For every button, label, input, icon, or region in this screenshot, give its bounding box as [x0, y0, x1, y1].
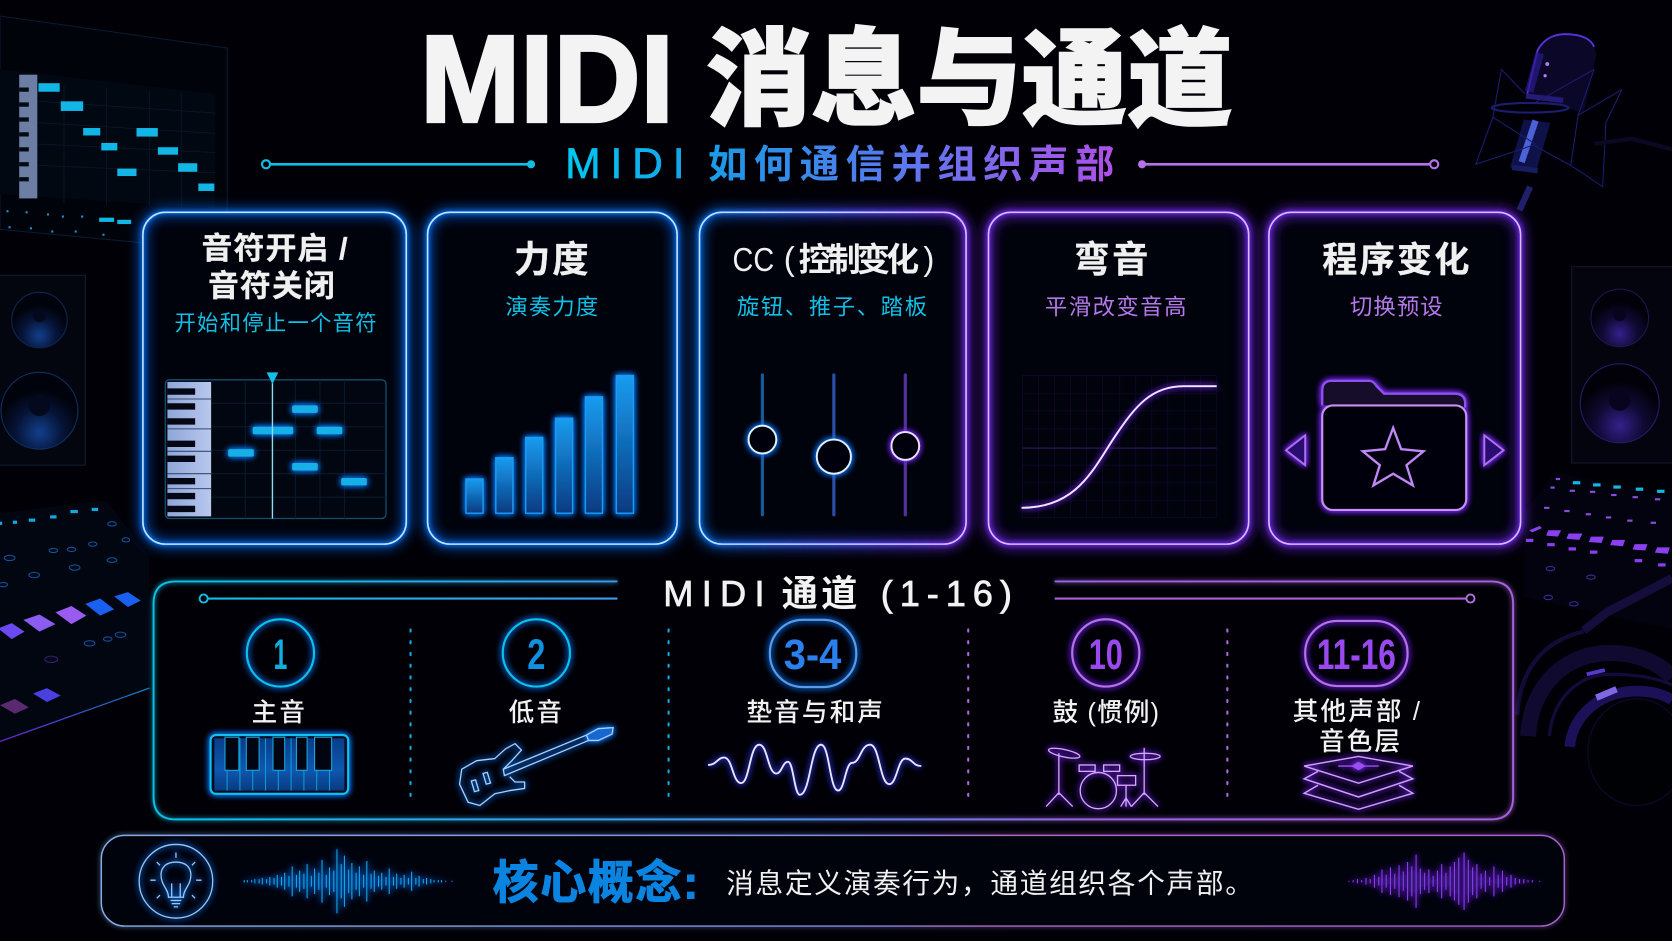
card frame: [700, 212, 966, 544]
card frame: [428, 212, 677, 544]
panel: pitch bend: [988, 212, 1249, 544]
label: 其他声部 /: [1293, 697, 1422, 726]
subtitle text: MIDI: [565, 140, 685, 188]
arrow right: [1484, 435, 1504, 465]
label: [1293, 697, 1422, 756]
heading: 力度: [514, 239, 591, 280]
badge 1: 1: [274, 631, 287, 679]
heading: 核心概念:: [493, 856, 698, 908]
badge 3-4: [770, 620, 856, 687]
card frame: [988, 212, 1249, 544]
panel: note on / off: [143, 212, 406, 544]
heading: 音符开启 /: [201, 231, 349, 266]
heading: ): [923, 241, 934, 278]
label: 主音: [252, 698, 307, 727]
badge 11-16: [1305, 621, 1408, 686]
subheading: 开始和停止一个音符: [174, 312, 378, 336]
text: key message: 消息定义演奏行为，通道组织各个声部。: [726, 868, 1253, 899]
subtitle text: [565, 140, 1114, 188]
label: 垫音与和声: [746, 698, 885, 727]
background: microphone: [1476, 34, 1672, 210]
subheading: 演奏力度: [505, 295, 599, 320]
icon: layers: [1304, 756, 1413, 809]
subheading: 旋钮、推子、踏板: [737, 295, 929, 320]
card frame: [143, 212, 406, 544]
folder icon with star: [1322, 381, 1466, 510]
channel 10: drums: [1046, 619, 1160, 809]
subtitle line right: [1138, 160, 1438, 168]
heading: [663, 573, 1012, 614]
bend curve: [1022, 376, 1217, 517]
waveform left: [244, 849, 452, 913]
bar chart: [466, 376, 633, 513]
icon: drum kit: [1046, 746, 1160, 809]
heading: 通道: [782, 573, 857, 614]
heading: MIDI: [663, 573, 765, 614]
channel 2: bass: [460, 619, 613, 806]
label: 音色层: [1319, 727, 1402, 756]
background: right mixer: [1525, 472, 1672, 629]
icon: wave: [708, 745, 921, 795]
icon: bass guitar: [460, 728, 613, 806]
panel: CC control change: [700, 212, 966, 544]
subtitle text: 如何通信并组织声部: [708, 143, 1114, 187]
badge 11-16: 11-16: [1317, 631, 1396, 679]
heading: 程序变化: [1322, 241, 1472, 280]
badge 10: [1072, 619, 1139, 687]
badge 10: 10: [1089, 631, 1123, 679]
icon: keyboard: [211, 735, 348, 794]
channel 1: lead: [211, 619, 348, 794]
heading: 弯音: [1074, 239, 1151, 280]
panel: program change: [1269, 212, 1521, 544]
badge 3-4: 3-4: [784, 631, 842, 679]
title: [420, 0, 1233, 149]
icon: light bulb: [139, 844, 213, 918]
panel: velocity: [428, 212, 677, 544]
heading: (: [784, 241, 795, 278]
channel 3-4: pads and harmony: [708, 620, 921, 795]
heading: (1-16): [881, 573, 1012, 614]
arrow left: [1286, 435, 1305, 465]
heading: [201, 231, 349, 304]
card frame: [1269, 212, 1521, 544]
subheading: 平滑改变音高: [1045, 295, 1188, 320]
badge 2: [503, 619, 570, 687]
piano roll: [165, 372, 386, 519]
label: 鼓 (惯例): [1052, 698, 1159, 727]
background: right studio speaker: [1572, 267, 1672, 463]
background: left studio speaker: [0, 275, 85, 465]
waveform right: [1349, 852, 1540, 910]
background: headphones: [1517, 578, 1672, 806]
title: MIDI: [420, 11, 674, 149]
callout: core concept: [101, 835, 1564, 926]
subtitle line left: [262, 160, 535, 168]
subtitle: [262, 140, 1438, 188]
panel: MIDI channels: [154, 573, 1513, 819]
badge 1: [247, 619, 314, 687]
sliders: [749, 373, 919, 516]
subheading: 切换预设: [1350, 295, 1444, 320]
dividers: [411, 629, 1227, 796]
heading: 音符关闭: [208, 269, 336, 304]
callout frame: [101, 835, 1564, 926]
channel 11-16: other parts and layers: [1293, 621, 1422, 809]
background: left monitor with piano roll: [0, 16, 227, 251]
background: left mixer: [0, 500, 149, 741]
label: 低音: [509, 698, 564, 727]
heading: CC: [733, 242, 774, 279]
badge 2: 2: [527, 631, 545, 679]
heading: 控制变化: [799, 242, 919, 279]
panel frame: [154, 581, 1513, 819]
heading: [733, 241, 934, 279]
